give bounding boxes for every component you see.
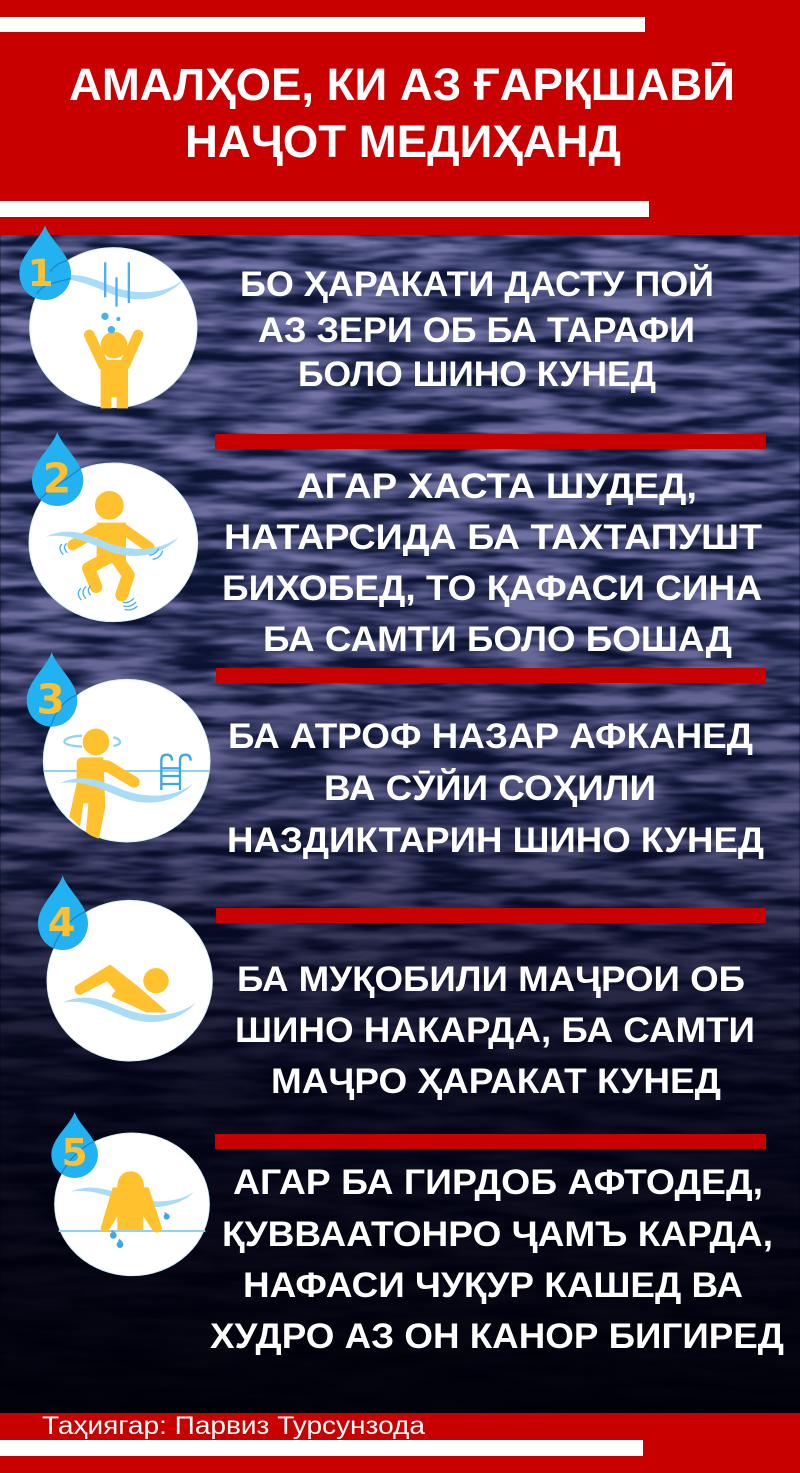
step 2 text: БА САМТИ БОЛО БОШАД	[263, 620, 732, 659]
step 4 text: БА МУҚОБИЛИ МАҶРОИ ОБ	[237, 960, 745, 999]
step 2 text: БИХОБЕД, ТО ҚАФАСИ СИНА	[222, 569, 762, 608]
step 1 text: АЗ ЗЕРИ ОБ БА ТАРАФИ	[258, 311, 695, 350]
step 3 text: БА АТРОФ НАЗАР АФКАНЕД	[228, 717, 753, 756]
divider 2	[216, 668, 766, 683]
step 2 text: АГАР ХАСТА ШУДЕД,	[297, 467, 697, 506]
step 5 icon: escaping a whirlpool: 5	[62, 1130, 88, 1174]
step 2 text: НАТАРСИДА БА ТАХТАПУШТ	[224, 518, 762, 557]
divider 4	[215, 1134, 766, 1149]
step 3 text: НАЗДИКТАРИН ШИНО КУНЕД	[227, 821, 764, 860]
step 3 text: ВА СӮЙИ СОҲИЛИ	[324, 768, 656, 808]
title: НАҶОТ МЕДИҲАНД	[185, 116, 621, 167]
step 5 text: НАФАСИ ЧУҚУР КАШЕД ВА	[243, 1266, 743, 1305]
step 3 icon: looking for the shore, pool ladder: 3	[37, 675, 65, 723]
title: АМАЛҲОЕ, КИ АЗ ҒАРҚШАВӢ	[69, 59, 735, 110]
step 1 text	[240, 264, 714, 394]
divider 3	[216, 908, 766, 923]
step 1 icon: swimmer rising to surface	[19, 225, 197, 408]
step 4 text: ШИНО НАКАРДА, БА САМТИ	[235, 1011, 755, 1050]
step 1 text: БО ҲАРАКАТИ ДАСТУ ПОЙ	[240, 264, 714, 304]
step 1 text: БОЛО ШИНО КУНЕД	[298, 355, 656, 394]
divider 1	[215, 434, 766, 449]
step 3 text	[227, 717, 764, 860]
step 5 text	[210, 1163, 784, 1356]
step 1 icon: swimmer rising to surface: 1	[28, 251, 54, 295]
step 4 text	[235, 960, 755, 1101]
step 3 icon: looking for the shore, pool ladder	[27, 652, 210, 842]
step 2 icon: floating figure: 2	[43, 454, 71, 502]
step 4 text: МАҶРО ҲАРАКАТ КУНЕД	[271, 1062, 721, 1101]
step 5 text: ХУДРО АЗ ОН КАНОР БИГИРЕД	[210, 1317, 784, 1356]
step 5 text: АГАР БА ГИРДОБ АФТОДЕД,	[233, 1163, 763, 1202]
author credit: Таҳиягар: Парвиз Турсунзода	[42, 1412, 425, 1440]
step 4 icon: swimmer: 4	[48, 901, 76, 947]
footer band with author credit	[0, 1412, 800, 1473]
step 4 icon: swimmer	[38, 875, 212, 1061]
step 2 text	[222, 467, 762, 659]
title	[69, 59, 735, 167]
header band	[0, 0, 800, 235]
step 2 icon: floating figure	[29, 432, 198, 622]
step 5 icon: escaping a whirlpool	[51, 1112, 209, 1276]
step 5 text: ҚУВВААТОНРО ҶАМЪ КАРДА,	[222, 1215, 773, 1254]
